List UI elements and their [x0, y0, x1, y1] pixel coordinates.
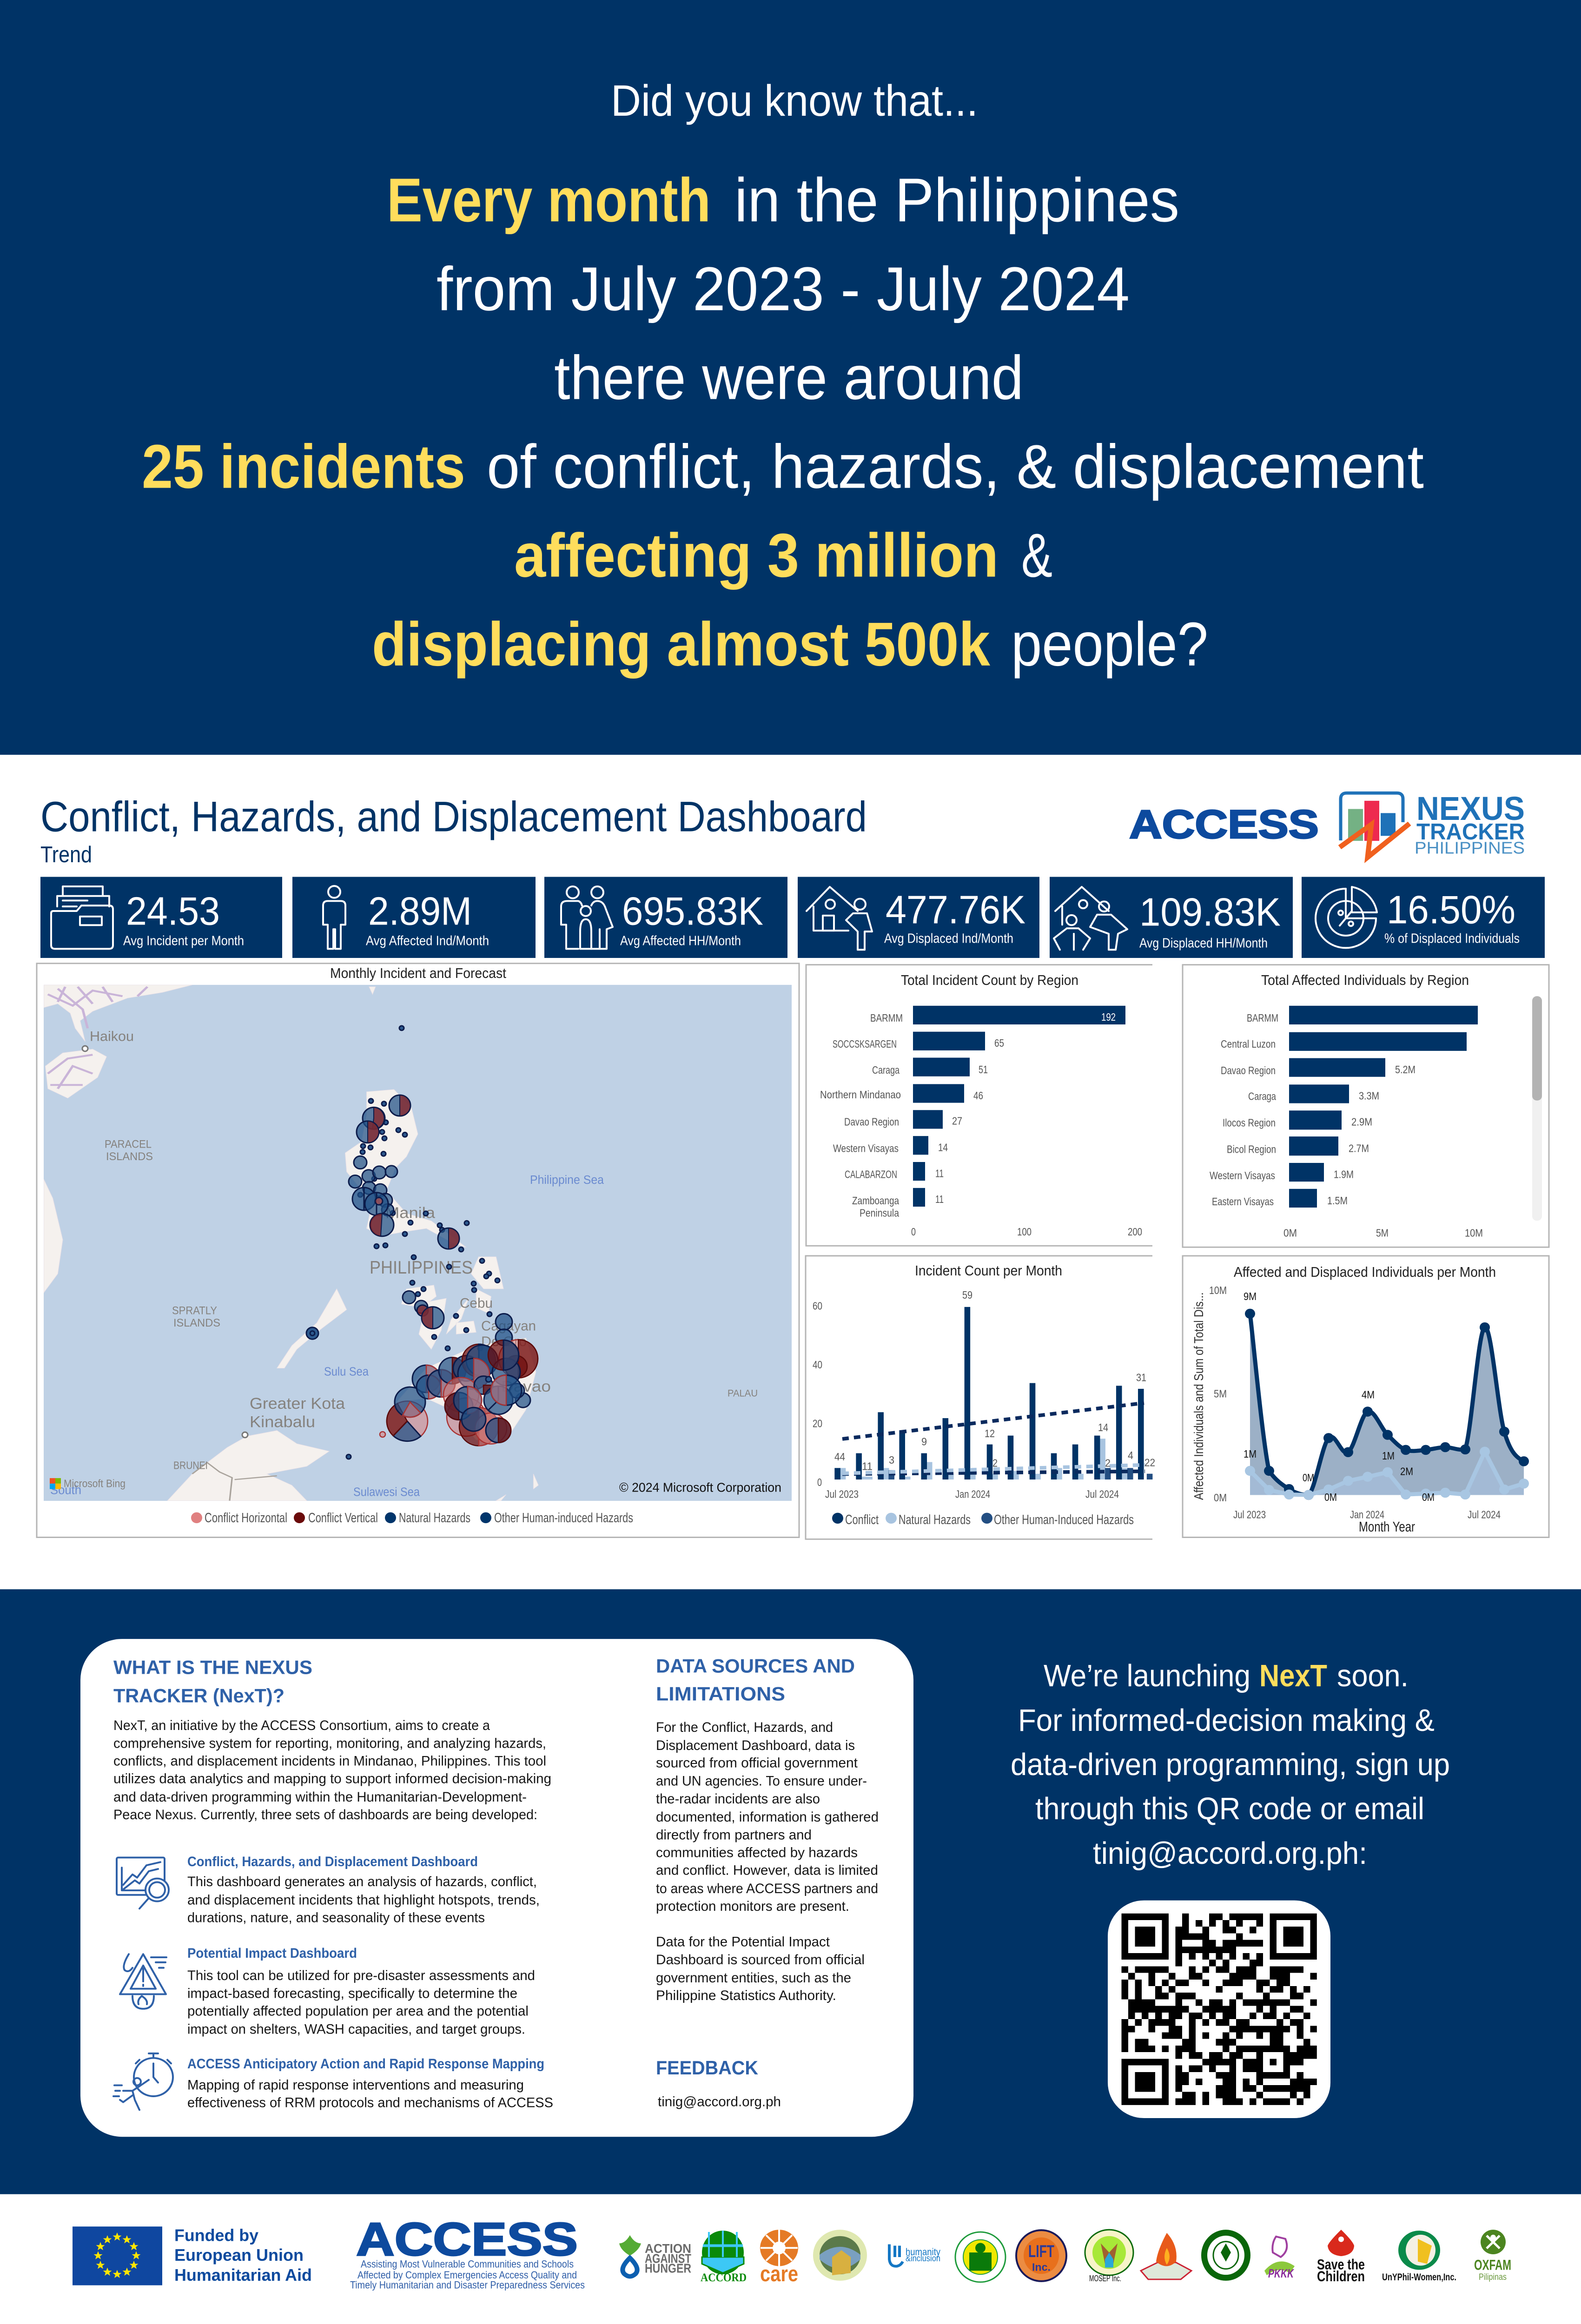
callout: launching NexT: soon.: [1337, 1659, 1409, 1693]
funded by text: European Union: [174, 2245, 304, 2265]
value labels: 2.9M: [1351, 1116, 1372, 1129]
heading: what is the nexus tracker: WHAT IS THE NEXUS: [113, 1657, 312, 1678]
KPI card: displaced households: 109.83K: [1139, 890, 1281, 934]
panel: hero banner: [0, 0, 1581, 755]
data sources paragraph 2: Data for the Potential Impact: [656, 1934, 830, 1950]
y axis labels: 0M: [1214, 1492, 1227, 1504]
region labels: Caraga: [1248, 1090, 1277, 1103]
microsoft bing mark: Microsoft Bing: [64, 1478, 126, 1490]
icon: folders: [51, 886, 113, 949]
logo: Save the Children: Children: [1317, 2268, 1365, 2284]
logo: Nexus Tracker Philippines: PHILIPPINES: [1415, 838, 1525, 857]
intro paragraph: [113, 1718, 551, 1822]
item: conflict dashboard: [187, 1854, 540, 1926]
heading: feedback: FEEDBACK: [656, 2057, 758, 2079]
data labels: 0M: [1422, 1491, 1435, 1504]
x axis labels: Jul 2024: [1085, 1488, 1119, 1500]
panel: Total Affected Individuals by Region: [1183, 965, 1549, 1247]
KPI card: affected individuals: [292, 877, 536, 958]
KPI card: incidents: Avg Incident per Month: [123, 934, 244, 948]
data labels: 2: [1105, 1457, 1111, 1470]
intro paragraph: utilizes data analytics and mapping to support informed decision-making: [113, 1771, 551, 1787]
logo: ACCESS with tagline: Assisting Most Vulnerable Communities and Schools: [361, 2258, 574, 2270]
item: conflict dashboard: and displacement incidents that highlight hotspots, trends,: [187, 1893, 540, 1908]
data sources paragraph 1: Displacement Dashboard, data is: [656, 1738, 855, 1753]
icon: person: [323, 886, 345, 949]
heading: data sources: [656, 1655, 855, 1705]
value labels: 46: [973, 1089, 983, 1102]
map labels: PALAU: [728, 1387, 758, 1399]
item: potential impact dashboard: impact-based forecasting, specifically to determine the: [187, 1986, 517, 2001]
heading: data sources: DATA SOURCES AND: [656, 1655, 855, 1677]
map labels: ISLANDS: [173, 1317, 220, 1329]
KPI card: displaced households: Avg Displaced HH/Month: [1139, 936, 1268, 951]
logo: UnYPhil-Women: UnYPhil-Women,Inc.: [1382, 2271, 1456, 2283]
map legend: Conflict Vertical: [308, 1511, 378, 1525]
KPI card: displaced individuals: 477.76K: [886, 888, 1025, 932]
region labels: Eastern Visayas: [1212, 1195, 1274, 1208]
map labels: South: [50, 1484, 81, 1497]
dashboard title: Conflict, Hazards, and Displacement Dashboard: [40, 792, 867, 840]
bars: [834, 1307, 1152, 1479]
map labels: PHILIPPINES: [370, 1257, 473, 1278]
value labels: 192: [1101, 1011, 1116, 1023]
region labels: [820, 1012, 903, 1220]
hero line 1: Every month: [387, 165, 711, 235]
region labels: Caraga: [872, 1064, 900, 1076]
chart title: Total Affected Individuals by Region: [1261, 972, 1469, 988]
KPI card: displaced households: [1050, 877, 1293, 958]
logo: EU flag: [73, 2226, 162, 2285]
region labels: Davao Region: [1221, 1064, 1276, 1077]
bars: [913, 1006, 1125, 1207]
data labels: 4M: [1362, 1389, 1375, 1401]
icon: house and family: [1054, 887, 1127, 950]
item: potential impact dashboard: potentially affected population per area and the potential: [187, 2004, 529, 2019]
logo: CARE: care: [760, 2262, 798, 2286]
KPI card: affected individuals: 2.89M: [368, 889, 472, 933]
logo: ACCORD: ACCORD: [701, 2271, 747, 2284]
intro paragraph: comprehensive system for reporting, monitoring, and analyzing hazards,: [113, 1736, 546, 1751]
panel: map Monthly Incident and Forecast: [37, 964, 799, 1538]
logo: MOSEP: MOSEP Inc.: [1089, 2273, 1121, 2283]
logo: Action Against Hunger: AGAINST: [645, 2251, 691, 2266]
y axis labels: 5M: [1214, 1388, 1227, 1400]
trend lines: [842, 1403, 1145, 1474]
x axis labels: Month Year: [1359, 1519, 1415, 1535]
data sources paragraph 1: [656, 1720, 879, 1914]
data labels: 4: [1128, 1449, 1133, 1462]
data labels: 9: [921, 1436, 927, 1448]
logo: LIFT Inc.: [1016, 2230, 1066, 2281]
data sources paragraph 1: to areas where ACCESS partners and: [656, 1881, 878, 1896]
region labels: Peninsula: [860, 1207, 900, 1220]
item: potential impact dashboard: Potential Impact Dashboard: [187, 1946, 357, 1961]
data sources paragraph 2: Philippine Statistics Authority.: [656, 1988, 836, 2003]
funded by text: Funded by: [174, 2226, 259, 2245]
value labels: [935, 1011, 1116, 1206]
callout: launching NexT: data-driven programming, sign up: [1011, 1748, 1450, 1782]
logo: MOSEP: [1085, 2230, 1133, 2283]
map labels: Davao: [501, 1378, 551, 1395]
map labels: Cagayan: [481, 1319, 536, 1334]
KPI card: affected households: [544, 877, 787, 958]
x axis labels: 0: [911, 1226, 916, 1238]
KPI card: affected households: 695.83K: [622, 889, 763, 933]
item: conflict dashboard: This dashboard generates an analysis of hazards, conflict,: [187, 1874, 537, 1889]
intro paragraph: and data-driven programming within the Humanitarian-Development-: [113, 1789, 527, 1805]
data sources paragraph 2: government entities, such as the: [656, 1970, 851, 1986]
map labels: ISLANDS: [106, 1150, 153, 1163]
data labels: 31: [1136, 1372, 1146, 1384]
region labels: Western Visayas: [1210, 1169, 1275, 1182]
item: rapid response mapping: [187, 2056, 553, 2110]
value labels: 3.3M: [1359, 1090, 1379, 1103]
hero line 6: displacing almost 500k: [372, 609, 990, 679]
data sources paragraph 1: protection monitors are present.: [656, 1899, 849, 1914]
region labels: Bicol Region: [1227, 1143, 1276, 1155]
y axis: 0: [817, 1476, 822, 1489]
area and line chart: [1245, 1309, 1529, 1500]
panel: Incident Count per Month: [806, 1256, 1155, 1539]
x axis labels: Jan 2024: [1350, 1509, 1384, 1521]
logo: flame: [1141, 2233, 1191, 2279]
data sources paragraph 1: the-radar incidents are also: [656, 1791, 820, 1807]
item: conflict dashboard: durations, nature, and seasonality of these events: [187, 1910, 485, 1926]
y axis: 40: [813, 1359, 822, 1371]
icon: family: [561, 886, 613, 949]
region labels: Zamboanga: [852, 1195, 900, 1207]
funded by text: Humanitarian Aid: [174, 2265, 312, 2284]
hero line 6: people?: [1011, 609, 1208, 679]
region labels: [1210, 1012, 1278, 1208]
data labels: 22: [1144, 1457, 1155, 1469]
logo: UnYPhil-Women: [1382, 2231, 1456, 2283]
icon: pie percent: [1316, 887, 1377, 948]
x axis labels: 200: [1128, 1226, 1142, 1238]
map markers: small incident dots: [306, 1026, 500, 1459]
value labels: 65: [994, 1037, 1004, 1050]
data labels: [1244, 1290, 1435, 1504]
value labels: [1327, 1063, 1416, 1207]
legend: Conflict: [845, 1512, 879, 1527]
intro paragraph: conflicts, and displacement incidents in Mindanao, Philippines. This tool: [113, 1754, 546, 1769]
y axis title: Affected Individuals and Sum of Total Dis...: [1191, 1292, 1206, 1500]
logo: ACCESS with tagline: ACCESS: [356, 2214, 578, 2265]
x axis labels: [1283, 1227, 1483, 1240]
hero line 2: from July 2023 - July 2024: [437, 254, 1130, 324]
region labels: Northern Mindanao: [820, 1089, 901, 1101]
funded by text: [174, 2226, 312, 2284]
region labels: CALABARZON: [845, 1169, 897, 1181]
map legend: Natural Hazards: [399, 1511, 470, 1525]
logo: Nexus Tracker Philippines: TRACKER: [1416, 819, 1525, 845]
data labels: 0M: [1324, 1491, 1337, 1504]
data labels: 11: [862, 1460, 873, 1472]
data labels: 59: [962, 1289, 972, 1301]
legend: Natural Hazards: [899, 1512, 971, 1527]
data labels: 0M: [1303, 1472, 1314, 1484]
value labels: 2.7M: [1349, 1142, 1369, 1155]
logo: CARE: [760, 2230, 798, 2286]
logo: Oxfam Pilipinas: Pilipinas: [1479, 2272, 1507, 2282]
KPI card: percent displaced: [1302, 877, 1545, 958]
feedback email: tinig@accord.org.ph: [658, 2094, 781, 2109]
logo: Humanity and Inclusion: humanity: [906, 2246, 940, 2258]
logo: Integrated Mindanaons Association: [955, 2232, 1005, 2282]
callout: launching NexT: We’re launching: [1044, 1659, 1250, 1693]
QR code: [1108, 1901, 1330, 2118]
map labels: Kinabalu: [250, 1413, 315, 1431]
logo: Humanity and Inclusion: [889, 2244, 940, 2266]
region labels: Western Visayas: [833, 1142, 899, 1155]
hero line 5: affecting 3 million: [514, 521, 999, 590]
data sources paragraph 1: and UN agencies. To ensure under-: [656, 1774, 867, 1789]
panel: Affected and Displaced Individuals per Month: [1183, 1256, 1549, 1538]
y axis: [813, 1300, 822, 1489]
KPI card: displaced individuals: [798, 877, 1039, 958]
panel: Total Incident Count by Region: [806, 965, 1152, 1246]
KPI card: incidents: 24.53: [126, 889, 220, 933]
logo: ACCESS with tagline: Timely Humanitarian and Disaster Preparedness Services: [350, 2279, 585, 2291]
data sources paragraph 1: directly from partners and: [656, 1828, 812, 1842]
value labels: 1.5M: [1327, 1195, 1348, 1207]
hero line 1: in the Philippines: [734, 165, 1179, 235]
logo: Nexus Tracker Philippines: NEXUS: [1416, 791, 1525, 827]
value labels: 11: [935, 1168, 944, 1180]
value labels: 27: [952, 1115, 962, 1128]
callout: launching NexT: tinig@accord.org.ph:: [1093, 1836, 1367, 1871]
item: rapid response mapping: ACCESS Anticipatory Action and Rapid Response Mapping: [187, 2056, 544, 2072]
callout: launching NexT: [1011, 1659, 1450, 1871]
chart title: Incident Count per Month: [915, 1262, 1062, 1279]
map labels: BRUNEI: [173, 1459, 208, 1472]
map legend: [191, 1511, 633, 1525]
heading: what is the nexus tracker: [113, 1657, 312, 1707]
value labels: 51: [979, 1063, 988, 1076]
map legend: Conflict Horizontal: [205, 1511, 287, 1525]
map labels: SPRATLY: [172, 1305, 217, 1317]
logo: ACCESS with tagline: [350, 2214, 585, 2291]
data labels: [834, 1289, 1155, 1472]
logo: ACCESS with tagline: Affected by Complex Emergencies Access Quality and: [357, 2269, 577, 2281]
logo: Community Organizers Multiversity: [813, 2230, 867, 2281]
hero line 3: there were around: [554, 343, 1024, 412]
heading: what is the nexus tracker: TRACKER (NexT)?: [113, 1685, 284, 1707]
bars: [1289, 1006, 1478, 1208]
logo: PKKK: PKKK: [1268, 2267, 1295, 2280]
hero line 4: [142, 432, 1424, 501]
logo: Oxfam Pilipinas: [1474, 2230, 1511, 2282]
chart title: Affected and Displaced Individuals per Month: [1234, 1264, 1496, 1280]
KPI card: percent displaced: 16.50%: [1387, 888, 1515, 932]
item: potential impact dashboard: This tool can be utilized for pre-disaster assessments and: [187, 1968, 535, 1983]
legend: [832, 1512, 1134, 1527]
logo: Oxfam Pilipinas: OXFAM: [1474, 2257, 1511, 2273]
map labels: [50, 1029, 758, 1499]
map labels: Philippine Sea: [530, 1174, 604, 1187]
y axis: 20: [813, 1418, 822, 1430]
x axis labels: 0M: [1283, 1227, 1297, 1240]
x axis labels: 100: [1017, 1226, 1032, 1238]
logo: Humanity and Inclusion: &inclusion: [906, 2253, 940, 2264]
value labels: 11: [935, 1193, 944, 1206]
x axis labels: [911, 1226, 1142, 1238]
KPI card: displaced individuals: Avg Displaced Ind/Month: [884, 931, 1013, 946]
KPI card: incidents: [40, 877, 282, 958]
icon: house and person: [807, 887, 872, 950]
hero intro line: Did you know that...: [611, 76, 978, 125]
intro paragraph: Peace Nexus. Currently, three sets of dashboards are being developed:: [113, 1807, 537, 1822]
data labels: 9M: [1244, 1290, 1257, 1303]
y axis labels: 10M: [1209, 1284, 1227, 1297]
KPI card: percent displaced: % of Displaced Individuals: [1384, 931, 1520, 946]
x axis labels: 10M: [1465, 1227, 1483, 1240]
data labels: 1M: [1244, 1448, 1257, 1460]
data sources paragraph 2: [656, 1934, 865, 2003]
x axis labels: 5M: [1376, 1227, 1389, 1240]
hero line 1: [387, 165, 1179, 235]
logo: LIFT Inc.: Inc.: [1032, 2261, 1051, 2273]
map markers: pie charts in Luzon and Visayas: [357, 1095, 459, 1329]
x axis labels: [825, 1488, 1119, 1500]
item: potential impact dashboard: [187, 1946, 535, 2037]
map markers: medium natural hazard circles: [349, 1156, 530, 1407]
logo: Notre Dame of Jolo: [1201, 2230, 1250, 2281]
panel: lower navy section: [0, 1589, 1581, 2194]
logo: Action Against Hunger: ACTION: [645, 2241, 691, 2256]
data sources paragraph 1: sourced from official government: [656, 1756, 858, 1770]
data labels: 1M: [1382, 1450, 1395, 1462]
map base with land: [44, 985, 792, 1501]
value labels: 14: [938, 1142, 948, 1154]
map legend: Other Human-induced Hazards: [494, 1511, 633, 1525]
hero line 5: &: [1021, 521, 1052, 590]
logo: PKKK: [1264, 2237, 1295, 2280]
region labels: Ilocos Region: [1223, 1117, 1276, 1129]
dashboard subtitle: Trend: [40, 842, 92, 867]
data sources paragraph 1: and conflict. However, data is limited: [656, 1863, 878, 1878]
heading: data sources: LIMITATIONS: [656, 1683, 785, 1705]
intro paragraph: NexT, an initiative by the ACCESS Consortium, aims to create a: [113, 1718, 490, 1733]
item: conflict dashboard: Conflict, Hazards, and Displacement Dashboard: [187, 1854, 478, 1869]
region labels: Davao Region: [844, 1116, 899, 1129]
item: rapid response mapping: effectiveness of RRM protocols and mechanisms of ACCESS: [187, 2095, 553, 2110]
region labels: BARMM: [1247, 1012, 1278, 1024]
data labels: 12: [985, 1427, 995, 1440]
data labels: 2M: [1400, 1465, 1413, 1478]
callout: launching NexT: through this QR code or email: [1035, 1792, 1424, 1826]
logo: Save the Children: Save the: [1317, 2256, 1365, 2272]
data labels: 44: [834, 1451, 845, 1463]
data sources paragraph 1: For the Conflict, Hazards, and: [656, 1720, 833, 1735]
region labels: SOCCSKSARGEN: [833, 1038, 897, 1050]
item: potential impact dashboard: impact on shelters, WASH capacities, and target groups.: [187, 2022, 525, 2037]
x axis labels: Jul 2023: [1233, 1509, 1266, 1521]
item: rapid response mapping: Mapping of rapid response interventions and measuring: [187, 2078, 524, 2093]
logo: ACCESS: ACCESS: [1129, 802, 1319, 847]
logo: ACCORD: [701, 2231, 747, 2284]
value labels: 1.9M: [1334, 1169, 1354, 1181]
map labels: Manila: [385, 1205, 435, 1221]
callout: launching NexT: For informed-decision making &: [1018, 1703, 1435, 1738]
logo: Save the Children: [1317, 2230, 1365, 2284]
map labels: PARACEL: [105, 1138, 152, 1151]
map labels: Greater Kota: [250, 1395, 345, 1413]
x axis labels: [1233, 1509, 1501, 1535]
map title: Monthly Incident and Forecast: [330, 965, 506, 981]
icon: stopwatch and runner: [113, 2053, 173, 2110]
x axis labels: Jul 2023: [825, 1488, 859, 1500]
icon: warning triangle: [120, 1954, 166, 2009]
value labels: 5.2M: [1395, 1063, 1416, 1076]
map copyright: © 2024 Microsoft Corporation: [619, 1480, 781, 1494]
scrollbar: [1532, 996, 1542, 1221]
data sources paragraph 1: documented, information is gathered: [656, 1809, 879, 1825]
logo: Nexus Tracker Philippines: [1340, 791, 1525, 857]
KPI card: affected households: Avg Affected HH/Month: [620, 934, 741, 948]
logo: Action Against Hunger: [619, 2235, 691, 2277]
region labels: BARMM: [870, 1012, 903, 1024]
hero line 4: of conflict, hazards, & displacement: [487, 432, 1424, 501]
hero line 4: 25 incidents: [142, 432, 465, 501]
region labels: Central Luzon: [1221, 1038, 1276, 1050]
panel: white info card: [80, 1639, 913, 2137]
x axis labels: Jul 2024: [1468, 1509, 1501, 1521]
logo: Action Against Hunger: HUNGER: [645, 2261, 691, 2275]
map labels: Haikou: [90, 1029, 134, 1044]
data sources paragraph 1: communities affected by hazards: [656, 1845, 858, 1860]
icon: chart with magnifier: [117, 1857, 169, 1908]
map labels: Sulawesi Sea: [353, 1486, 420, 1499]
y axis: 60: [813, 1300, 822, 1312]
KPI card: affected individuals: Avg Affected Ind/Month: [366, 934, 489, 948]
map markers: pie charts in Mindanao: [380, 1340, 538, 1446]
logo: LIFT Inc.: LIFT: [1028, 2241, 1054, 2261]
legend: Other Human-Induced Hazards: [994, 1512, 1134, 1527]
map labels: Cebu: [460, 1296, 493, 1311]
map labels: Sulu Sea: [324, 1366, 369, 1379]
chart title: Total Incident Count by Region: [901, 972, 1078, 988]
callout: launching NexT: NexT: [1259, 1659, 1327, 1693]
data sources paragraph 2: Dashboard is sourced from official: [656, 1952, 865, 1967]
x axis labels: Jan 2024: [955, 1488, 990, 1500]
data labels: 14: [1098, 1421, 1108, 1434]
y axis labels: [1209, 1284, 1227, 1504]
map labels: De Oro: [481, 1334, 527, 1349]
data labels: 3: [889, 1454, 894, 1466]
data labels: 2: [992, 1457, 998, 1470]
